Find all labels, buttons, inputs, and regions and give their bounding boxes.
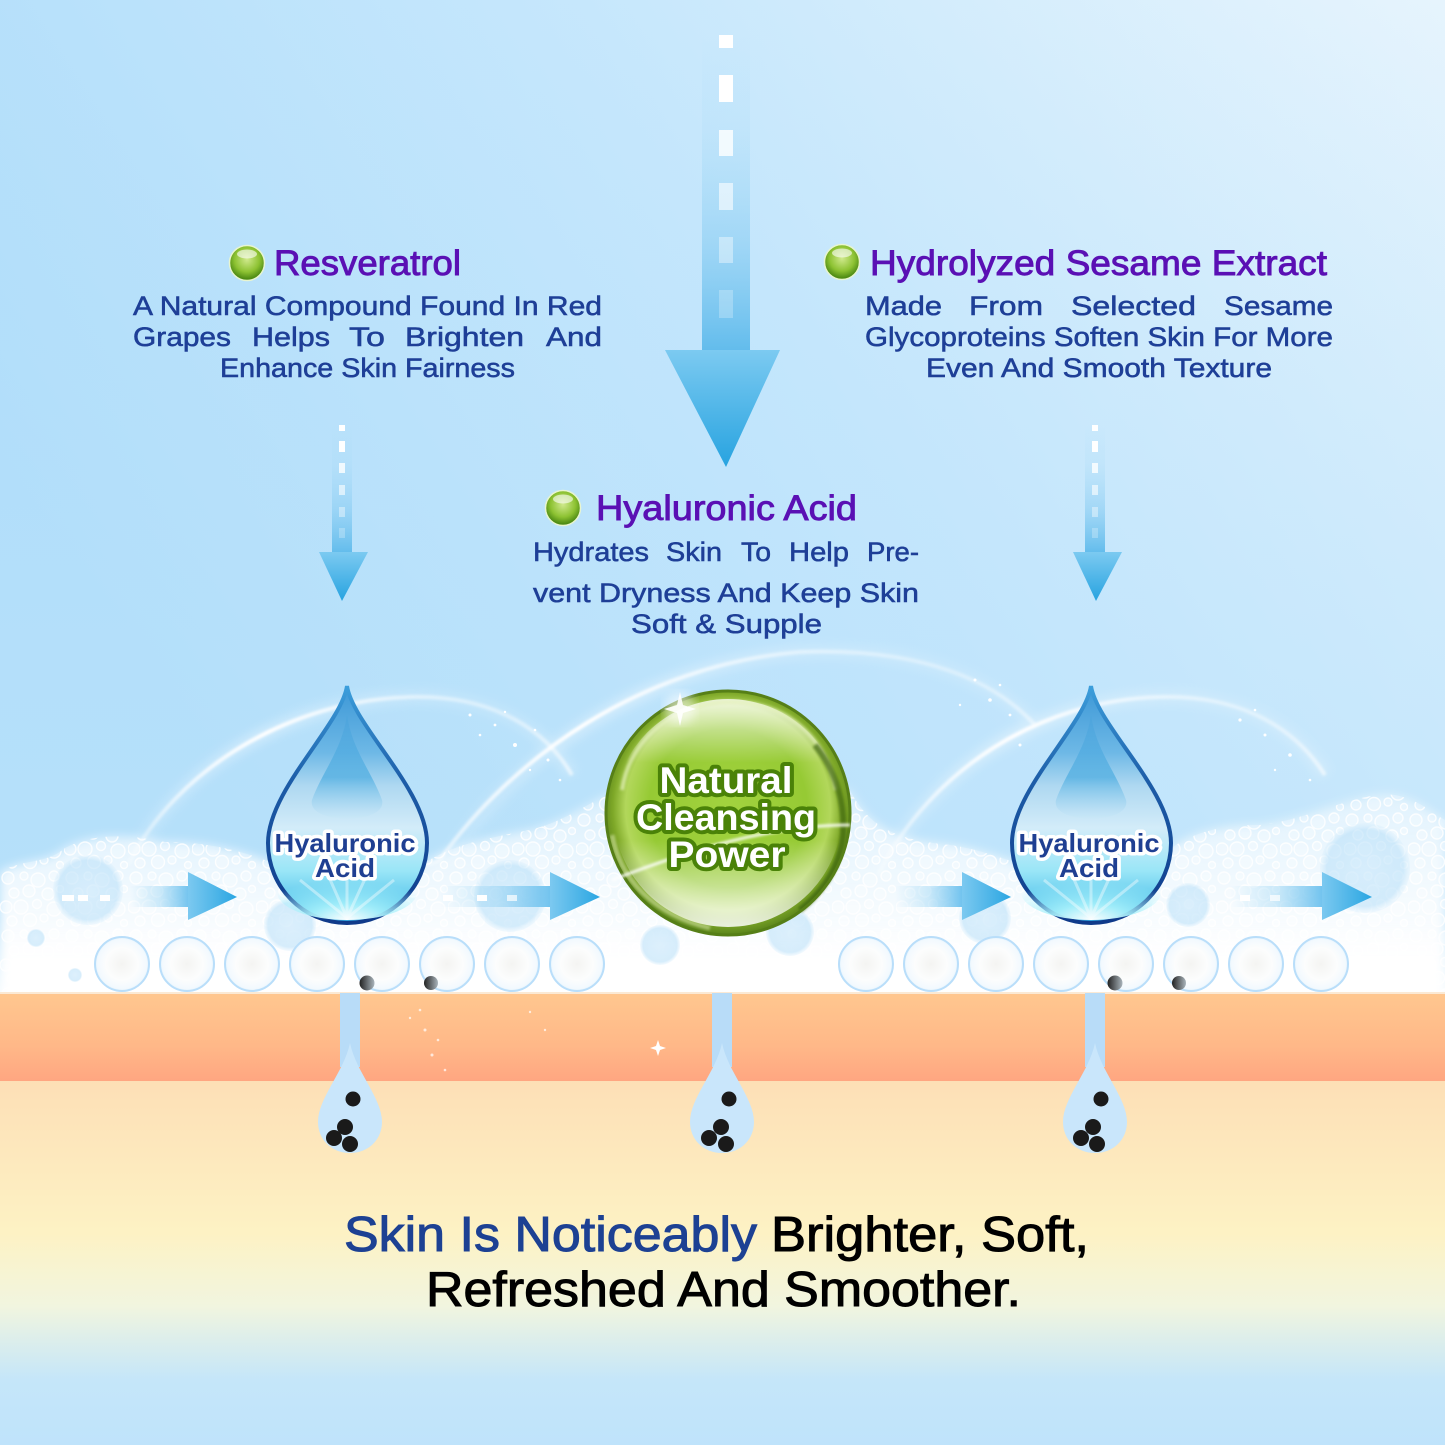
dirt specks <box>360 976 1186 990</box>
pore: center <box>690 993 754 1153</box>
horizontal arrow 1 <box>62 872 237 920</box>
pore: left <box>318 993 382 1153</box>
label: natural cleansing power: Natural <box>660 760 792 801</box>
description: resveratrol <box>133 291 602 383</box>
description: sesame: Made <box>865 291 942 321</box>
small arrow: right <box>1073 425 1122 601</box>
label: hyaluronic acid: Acid <box>1059 853 1119 883</box>
bubble row: left <box>95 937 604 991</box>
water drop: left <box>268 686 427 923</box>
sky background <box>0 0 1445 1000</box>
description: sesame: Sesame <box>1224 291 1333 321</box>
description: sesame: Selected <box>1071 291 1196 321</box>
upper skin layer <box>0 992 1445 1081</box>
description: resveratrol: To <box>349 322 385 352</box>
description: hyaluronic acid: To <box>741 537 771 567</box>
closing statement <box>344 1208 1089 1317</box>
description: sesame: Even And Smooth Texture <box>926 353 1272 383</box>
description: resveratrol: Brighten <box>405 322 524 352</box>
large soap bubbles <box>27 823 1410 982</box>
label: hyaluronic acid: Acid <box>315 853 375 883</box>
big downward arrow <box>665 35 780 467</box>
text block: hyaluronic acid <box>533 489 919 639</box>
closing statement: Brighter, Soft, <box>771 1208 1089 1262</box>
horizontal arrow 2 <box>440 872 600 920</box>
swoosh arcs <box>128 652 1325 900</box>
lower skin layer <box>0 1080 1445 1445</box>
description: sesame <box>865 291 1333 383</box>
description: hyaluronic acid: vent Dryness And Keep Skin <box>533 578 919 608</box>
description: resveratrol: And <box>546 322 602 352</box>
label: natural cleansing power: Power <box>668 834 786 875</box>
label: hyaluronic acid <box>1018 828 1160 883</box>
water drop: right <box>1012 686 1171 923</box>
icon: green ball <box>824 244 860 280</box>
heading: resveratrol: Resveratrol <box>274 244 461 283</box>
bubble row: right <box>839 937 1348 991</box>
foam layer <box>0 790 1445 1000</box>
description: hyaluronic acid: Help <box>789 537 849 567</box>
description: hyaluronic acid: Pre- <box>867 537 919 567</box>
description: resveratrol: A Natural Compound Found In Red <box>133 291 602 321</box>
small arrow: left <box>319 425 368 601</box>
description: sesame: Glycoproteins Soften Skin For More <box>865 322 1333 352</box>
green sphere: natural cleansing power <box>605 690 851 936</box>
closing statement: Skin Is Noticeably <box>344 1208 758 1262</box>
description: resveratrol: Enhance Skin Fairness <box>220 353 515 383</box>
description: resveratrol: Grapes <box>133 322 231 352</box>
horizontal arrow 3 <box>895 872 1011 920</box>
sparkles <box>468 678 1311 781</box>
icon: green ball <box>230 246 264 280</box>
text block: hydrolyzed sesame extract <box>824 244 1333 383</box>
label: hyaluronic acid: Hyaluronic <box>274 828 416 858</box>
description: resveratrol: Helps <box>252 322 330 352</box>
label: natural cleansing power: Cleansing <box>636 797 816 838</box>
description: hyaluronic acid: Soft & Supple <box>631 609 822 639</box>
description: hyaluronic acid: Hydrates <box>533 537 649 567</box>
description: sesame: From <box>969 291 1043 321</box>
label: hyaluronic acid <box>274 828 416 883</box>
pore: right <box>1063 993 1127 1153</box>
heading: hydrolyzed sesame extract: Hydrolyzed Sesame Extract <box>870 244 1327 283</box>
label: hyaluronic acid: Hyaluronic <box>1018 828 1160 858</box>
label: natural cleansing power <box>636 760 816 875</box>
closing statement: Refreshed And Smoother. <box>426 1263 1021 1317</box>
icon: green ball <box>546 490 580 526</box>
description: hyaluronic acid: Skin <box>666 537 722 567</box>
description: hyaluronic acid <box>533 537 919 639</box>
horizontal arrow 4 <box>1230 872 1372 920</box>
text block: resveratrol <box>133 244 602 383</box>
heading: hyaluronic acid: Hyaluronic Acid <box>596 489 857 528</box>
